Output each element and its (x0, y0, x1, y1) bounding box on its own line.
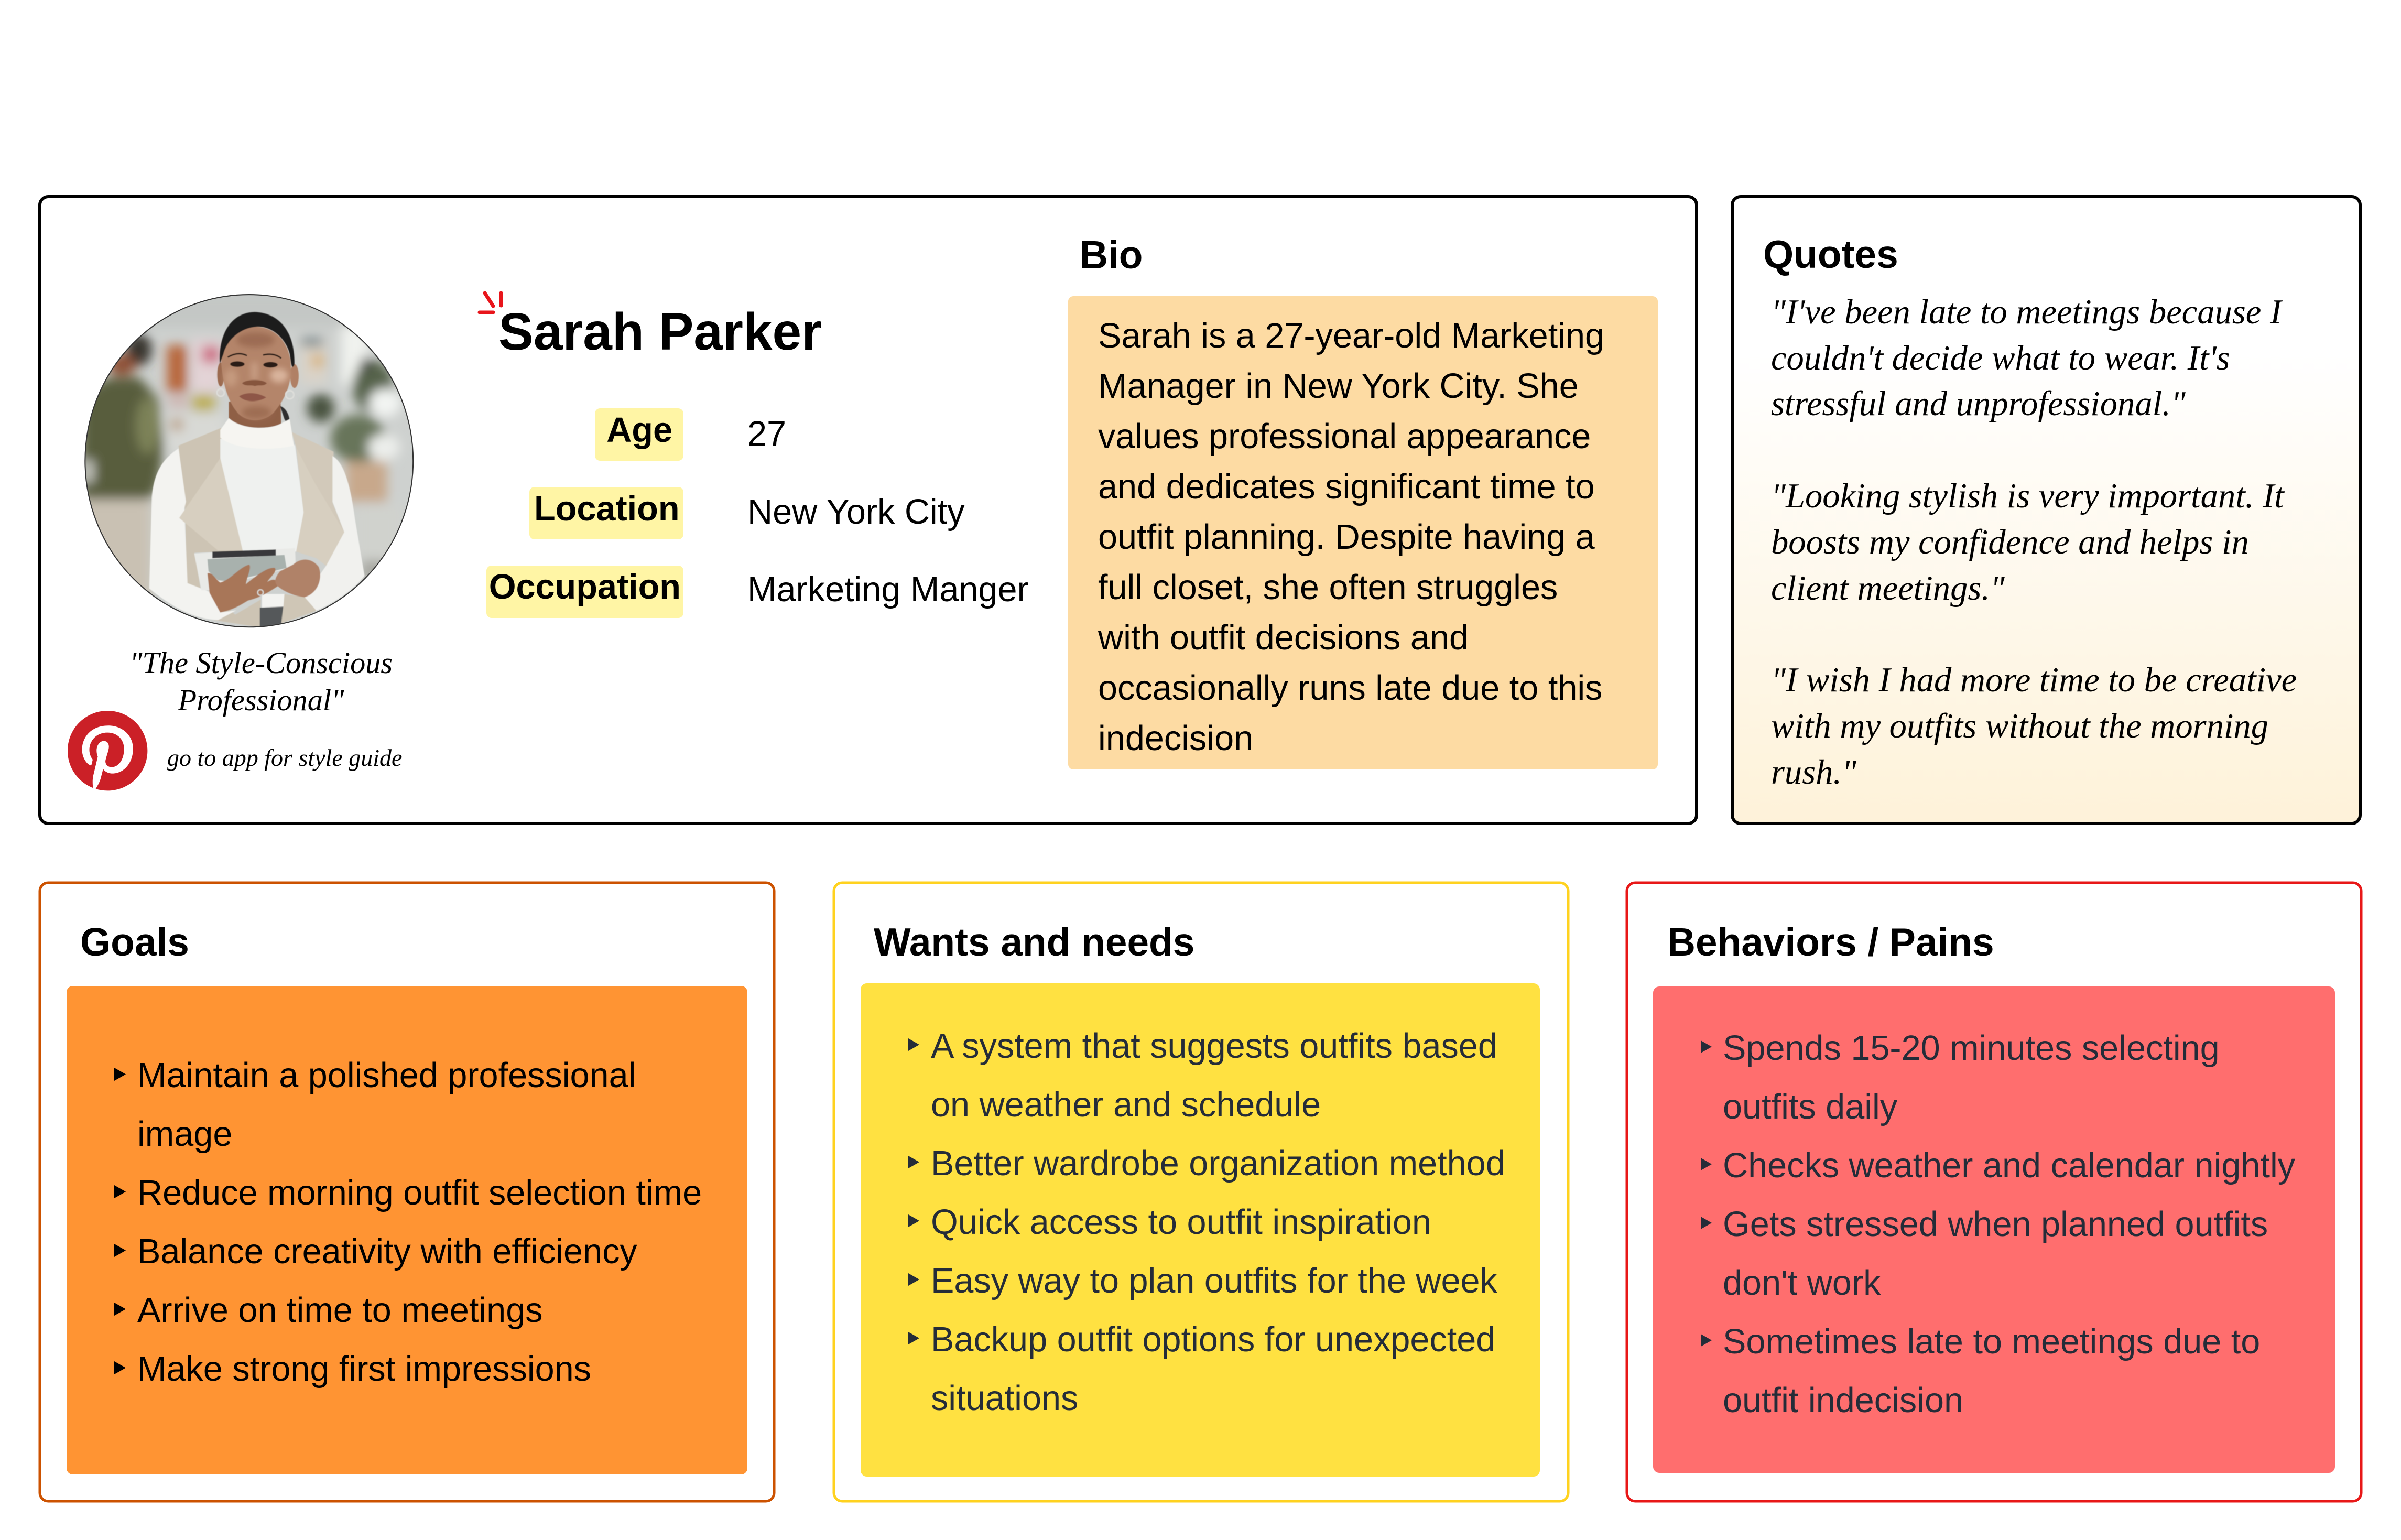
mouth (239, 393, 266, 401)
goals list: Balance creativity with efficiency (137, 1232, 637, 1271)
wants list: A system that suggests outfits based (931, 1027, 1497, 1066)
attribute: age (595, 408, 786, 461)
right sleeve (305, 456, 365, 611)
left vest (179, 428, 261, 627)
quotes text: couldn't decide what to wear. It's (1771, 339, 2230, 377)
tablet (194, 548, 296, 590)
quotes text: client meetings." (1771, 569, 2005, 608)
bio text: indecision (1098, 719, 1253, 758)
goals list: Make strong first impressions (137, 1350, 591, 1389)
goals heading: Goals (80, 920, 189, 964)
behaviors list: don't work (1723, 1264, 1881, 1303)
bio text: and dedicates significant time to (1098, 468, 1595, 506)
persona tagline: Professional" (177, 683, 344, 717)
quotes text: stressful and unprofessional." (1771, 385, 2186, 423)
turtleneck (220, 418, 294, 449)
panel: profile (40, 197, 1697, 823)
earrings (217, 389, 224, 396)
behaviors list: Spends 15-20 minutes selecting (1723, 1029, 2220, 1068)
behaviors list (1653, 986, 2335, 1473)
left hand (208, 565, 279, 612)
face (221, 327, 291, 420)
right vest (292, 432, 344, 566)
name: Sarah Parker (498, 302, 822, 361)
goals list: Reduce morning outfit selection time (137, 1174, 702, 1212)
behaviors list: outfit indecision (1723, 1381, 1963, 1420)
behaviors list: Checks weather and calendar nightly (1723, 1146, 2296, 1185)
quotes text (1771, 293, 2297, 791)
brows (227, 354, 247, 357)
left sleeve (149, 449, 236, 620)
behaviors list: Gets stressed when planned outfits (1723, 1205, 2268, 1244)
quotes text: with my outfits without the morning (1771, 707, 2268, 745)
quotes heading: Quotes (1763, 232, 1898, 276)
attribute: age: Age (606, 411, 672, 450)
icon: red spark (480, 293, 501, 312)
goals list: Maintain a polished professional (137, 1056, 636, 1095)
goals list: Arrive on time to meetings (137, 1291, 543, 1330)
panel: wants and needs (834, 883, 1568, 1501)
attribute: age: 27 (747, 415, 786, 453)
panel: quotes (1732, 197, 2360, 823)
wants list: Quick access to outfit inspiration (931, 1203, 1431, 1242)
bio text: occasionally runs late due to this (1098, 669, 1602, 708)
quotes text: "I wish I had more time to be creative (1771, 661, 2297, 699)
eyes (230, 361, 245, 367)
bio text: values professional appearance (1098, 417, 1591, 456)
wants list: Better wardrobe organization method (931, 1144, 1505, 1183)
goals list (67, 986, 747, 1474)
bun shadow (280, 406, 290, 421)
nose (242, 380, 267, 386)
quotes text: boosts my confidence and helps in (1771, 523, 2249, 561)
behaviors list: Sometimes late to meetings due to (1723, 1322, 2260, 1361)
attribute: occupation (486, 566, 1029, 618)
wants list: Backup outfit options for unexpected (931, 1320, 1495, 1359)
torso (220, 439, 303, 551)
wants list (861, 983, 1540, 1477)
behaviors heading: Behaviors / Pains (1667, 920, 1994, 964)
bio text: outfit planning. Despite having a (1098, 518, 1595, 557)
neck (229, 402, 281, 429)
panel: goals (40, 883, 774, 1501)
ears (217, 363, 224, 386)
wants heading: Wants and needs (874, 920, 1194, 964)
attribute: occupation: Occupation (489, 568, 681, 606)
bio text: Manager in New York City. She (1098, 367, 1579, 406)
bio text (1068, 296, 1658, 769)
quotes text: "I've been late to meetings because I (1771, 293, 2283, 331)
lapels (179, 458, 243, 550)
bio text: Sarah is a 27-year-old Marketing (1098, 317, 1604, 355)
quotes text: rush." (1771, 753, 1857, 791)
behaviors list: outfits daily (1723, 1088, 1898, 1126)
attribute: occupation: Marketing Manger (747, 570, 1029, 609)
panel: behaviors and pains (1627, 883, 2361, 1501)
quotes text: "Looking stylish is very important. It (1771, 477, 2285, 515)
goals list: image (137, 1115, 232, 1154)
attribute: location: New York City (747, 493, 965, 532)
attribute: location: Location (534, 490, 679, 528)
bio text: with outfit decisions and (1098, 619, 1469, 657)
attribute: location (529, 487, 965, 539)
wants list: Easy way to plan outfits for the week (931, 1262, 1498, 1300)
hair (220, 312, 295, 367)
wants list: on weather and schedule (931, 1086, 1321, 1124)
wants list: situations (931, 1379, 1078, 1418)
bio heading: Bio (1080, 233, 1143, 277)
photo: woman holding a tablet (81, 291, 417, 632)
persona tagline (129, 646, 393, 717)
app note: go to app for style guide (167, 744, 402, 771)
bio text: full closet, she often struggles (1098, 568, 1558, 607)
right hand (275, 560, 320, 597)
icon: pinterest (68, 711, 147, 790)
persona tagline: "The Style-Conscious (129, 646, 393, 680)
